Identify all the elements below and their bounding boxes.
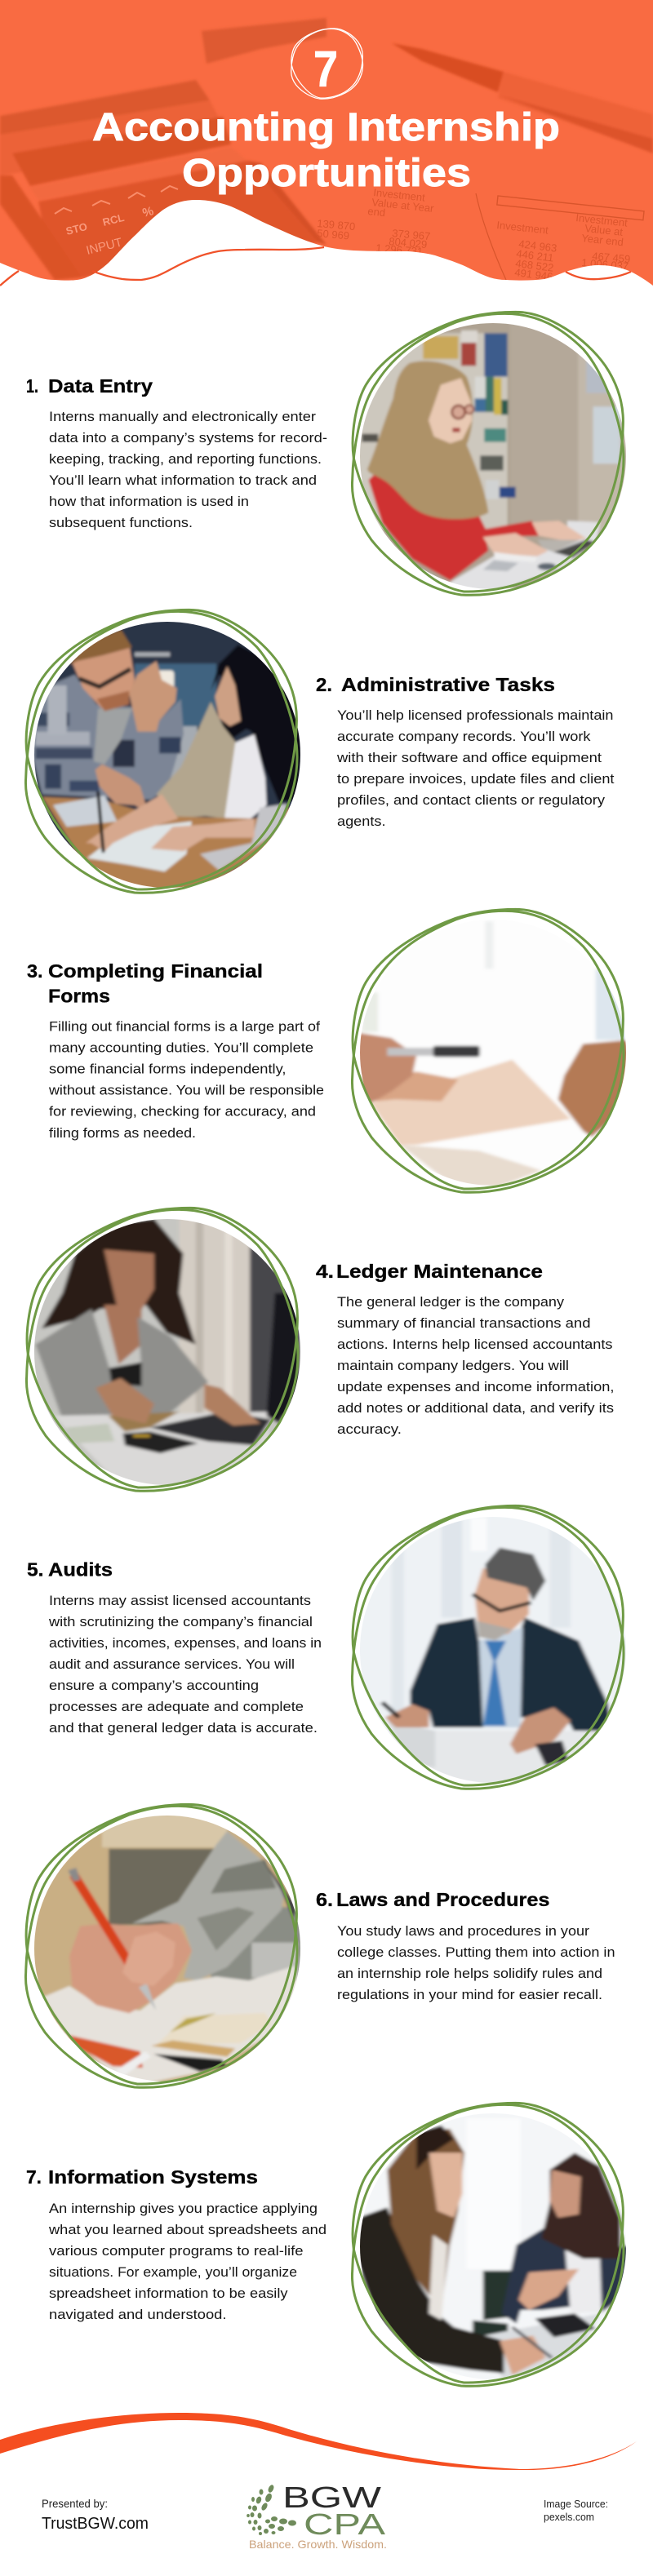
title: Opportunities (182, 152, 471, 195)
heading: Ledger Maintenance: 4. (316, 1261, 334, 1282)
ledger figures: 468 522 (515, 257, 554, 274)
footer: image source: Image Source: (544, 2498, 608, 2510)
header banner (0, 0, 653, 294)
text: Information Systems description: situations. For example, you’ll organize (49, 2265, 297, 2280)
photo: woman working at a laptop with calculator (34, 1219, 300, 1485)
heading: Information Systems: 7. (26, 2166, 42, 2188)
ledger figures: 50 969 (317, 227, 350, 242)
ledger figures: Investment (373, 186, 426, 204)
text: Ledger Maintenance description: maintain company ledgers. You will (337, 1359, 569, 1373)
header background: calculator and ledger photo tinted orange: % (141, 204, 155, 220)
numeral 7: 7 (313, 42, 338, 98)
icon: sketched ring around the numeral (291, 29, 363, 99)
text: Data Entry description: data into a company’s systems for record- (49, 431, 327, 446)
text: Administrative Tasks description: profiles, and contact clients or regulatory (337, 793, 606, 808)
icon: green sketched rings (352, 1505, 624, 1789)
icon: logo leaf dots (247, 2484, 296, 2535)
text: Completing Financial Forms description: without assistance. You will be responsible (48, 1084, 324, 1098)
heading: Information Systems: Information Systems (48, 2166, 258, 2188)
heading: Administrative Tasks: Administrative Tasks (341, 674, 555, 695)
header background: calculator and ledger photo tinted orange: INPUT (85, 235, 124, 258)
header background: calculator and ledger photo tinted orange: STO (64, 220, 88, 237)
heading: Administrative Tasks: 2. (316, 674, 332, 695)
panel: 4 Ledger Maintenance (25, 1208, 614, 1495)
panel: 1 Data Entry (26, 304, 635, 602)
orange wave line (0, 247, 631, 286)
icon: green sketched rings (352, 2103, 624, 2386)
text: Information Systems description: what you learned about spreadsheets and (48, 2223, 326, 2237)
text: Data Entry description (49, 410, 327, 530)
text: Data Entry description: Interns manually and electronically enter (49, 410, 317, 424)
white wave edge (0, 200, 653, 294)
text: Laws and Procedures description: an internship role helps solidify rules and (337, 1966, 602, 1981)
text: Data Entry description: keeping, tracking, and reporting functions. (49, 452, 322, 467)
text: Ledger Maintenance description: actions. Interns help licensed accountants (337, 1337, 612, 1352)
text: Information Systems description: An internship gives you practice applying (49, 2201, 318, 2216)
heading: Completing Financial Forms (27, 960, 263, 1007)
text: Information Systems description: spreadsheet information to be easily (49, 2286, 288, 2301)
footer: image source (544, 2498, 608, 2523)
text: Data Entry description: subsequent functions. (49, 516, 193, 530)
footer: presented by (42, 2497, 149, 2533)
ledger figures: 424 963 (518, 237, 557, 255)
footer: image source: pexels.com (544, 2511, 594, 2523)
heading: Completing Financial Forms: Forms (48, 986, 110, 1007)
title: Accounting Internship (92, 106, 560, 149)
text: Completing Financial Forms description: filing forms as needed. (49, 1126, 196, 1141)
panel: 6 Laws and Procedures (18, 1796, 615, 2095)
text: Ledger Maintenance description: accuracy. (337, 1422, 402, 1437)
text: Audits description (48, 1594, 322, 1736)
heading: Completing Financial Forms: 3. (27, 960, 42, 982)
header background: calculator and ledger photo tinted orange: RCL (101, 211, 126, 228)
heading: Audits (27, 1558, 113, 1580)
logo word CPA: CPA (304, 2507, 385, 2541)
text: Administrative Tasks description: accurate company records. You’ll work (337, 729, 591, 744)
icon: green sketched rings (352, 909, 624, 1192)
text: Laws and Procedures description: You study laws and procedures in your (337, 1924, 590, 1939)
ledger figures: 446 211 (516, 247, 554, 264)
logo tagline: Balance. Growth. Wisdom. (249, 2538, 387, 2551)
text: Audits description: and that general ledger data is accurate. (49, 1721, 318, 1736)
text: Completing Financial Forms description: Filling out financial forms is a large part of (49, 1020, 320, 1035)
ledger figures: 467 459 (592, 250, 631, 265)
title (92, 106, 560, 195)
photo: two colleagues reviewing papers (34, 622, 300, 888)
logo word BGW: BGW (282, 2481, 381, 2514)
footer: presented by: Presented by: (42, 2497, 108, 2510)
text: Administrative Tasks description: to prepare invoices, update files and client (337, 772, 615, 787)
heading: Data Entry: Data Entry (48, 375, 153, 397)
text: Completing Financial Forms description (48, 1020, 324, 1141)
text: Information Systems description: navigated and understood. (49, 2308, 227, 2322)
text: Completing Financial Forms description: many accounting duties. You’ll complete (49, 1041, 313, 1056)
text: Ledger Maintenance description: update expenses and income information, (337, 1380, 614, 1394)
photo: woman typing at a laptop (360, 323, 626, 589)
photo: two women in a meeting (360, 2113, 626, 2379)
text: Audits description: activities, incomes, expenses, and loans in (49, 1636, 322, 1651)
heading: Data Entry: 1. (26, 375, 38, 397)
photo: hand writing with a red pen (34, 1816, 300, 2082)
text: Ledger Maintenance description: The general ledger is the company (337, 1295, 565, 1310)
panel: 7 Information Systems (26, 2103, 637, 2388)
heading: Completing Financial Forms: Completing Financial (48, 960, 263, 982)
calculator keys (55, 186, 178, 214)
icon: green sketched rings (25, 1804, 297, 2087)
heading: Ledger Maintenance: Ledger Maintenance (336, 1261, 543, 1282)
logo: BGW CPA (247, 2481, 387, 2551)
header background: calculator and ledger photo tinted orange (0, 0, 653, 287)
ledger figures: Investment (575, 211, 629, 229)
text: Completing Financial Forms description: some financial forms independently, (49, 1062, 286, 1076)
heading: Laws and Procedures: 6. (316, 1889, 333, 1910)
ledger figures: 804 029 (389, 235, 428, 251)
panel: 5 Audits (27, 1505, 637, 1791)
text: Ledger Maintenance description (337, 1295, 614, 1437)
text: Audits description: audit and assurance services. You will (49, 1657, 295, 1672)
text: Laws and Procedures description (337, 1924, 615, 2002)
panel: 3 Completing Financial Forms (27, 909, 637, 1198)
text: Ledger Maintenance description: summary of financial transactions and (337, 1316, 591, 1331)
text: Administrative Tasks description: You’ll help licensed professionals maintain (337, 708, 614, 723)
text: Ledger Maintenance description: add notes or additional data, and verify its (337, 1401, 614, 1416)
ledger figures: 1 006 037 (581, 256, 629, 273)
ledger figures: Year end (581, 232, 624, 248)
photo: businessman signing paperwork (354, 1514, 637, 1791)
ledger figures (317, 186, 644, 283)
text: Data Entry description: You’ll learn what information to track and (49, 473, 317, 488)
heading: Laws and Procedures: Laws and Procedures (336, 1889, 550, 1910)
icon: green sketched rings (25, 610, 297, 893)
text: Data Entry description: how that information is used in (49, 494, 249, 509)
ledger figures: Value at Year (371, 196, 435, 215)
text: Administrative Tasks description: agents. (337, 814, 385, 829)
text: Information Systems description: various computer programs to real-life (49, 2244, 304, 2259)
text: Laws and Procedures description: college classes. Putting them into action in (337, 1945, 615, 1960)
ledger figures: Value at (584, 222, 624, 238)
text: Audits description: Interns may assist licensed accountants (49, 1594, 311, 1608)
panel: 2 Administrative Tasks (18, 601, 615, 900)
ledger figures: 1 296 731 (375, 242, 424, 258)
ledger figures: 491 946 (514, 266, 553, 283)
footer orange swoosh (0, 2413, 637, 2470)
text: Audits description: with scrutinizing the company’s financial (48, 1615, 313, 1629)
ledger figures: 373 967 (392, 227, 431, 242)
text: Laws and Procedures description: regulations in your mind for easier recall. (337, 1988, 602, 2002)
text: Completing Financial Forms description: for reviewing, checking for accuracy, and (49, 1105, 316, 1120)
text: Audits description: ensure a company’s accounting (49, 1678, 259, 1693)
icon: green sketched rings (352, 312, 624, 595)
text: Audits description: processes are adequate and complete (49, 1700, 304, 1714)
heading: Audits: 5. (27, 1558, 44, 1580)
icon: green sketched rings (26, 1208, 298, 1491)
photo: hands passing a document and pen (360, 920, 626, 1186)
ledger figures: Investment (496, 219, 549, 237)
heading: Audits: Audits (48, 1558, 113, 1580)
footer: presented by: TrustBGW.com (42, 2515, 149, 2533)
ledger figures: 139 870 (317, 217, 356, 233)
ledger figures: end (367, 205, 386, 219)
text: Administrative Tasks description (336, 708, 615, 829)
text: Information Systems description (48, 2201, 326, 2322)
text: Administrative Tasks description: with their software and office equipment (336, 751, 602, 765)
